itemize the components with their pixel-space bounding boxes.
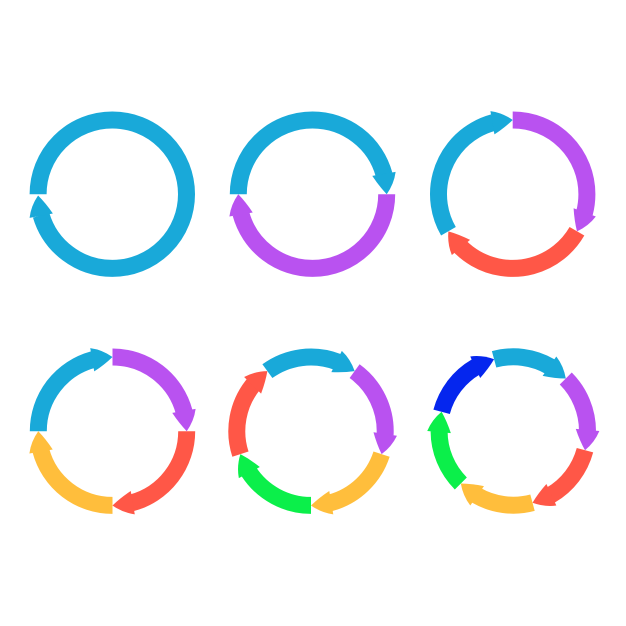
arrow: purple <box>224 120 387 268</box>
arrow: blue <box>238 120 401 268</box>
arrow: purple <box>438 120 596 268</box>
arrow: red <box>422 340 604 522</box>
wheel: four-step cycle <box>24 343 201 520</box>
arrow: blue <box>38 343 187 505</box>
arrow: green <box>408 326 618 536</box>
arrow: blue <box>422 340 604 522</box>
arrow: yellow <box>422 340 604 522</box>
wheel: three-step cycle <box>411 93 614 296</box>
arrow: blue <box>207 328 415 535</box>
wheel: six-step cycle <box>408 326 618 536</box>
arrow: purple <box>38 357 201 505</box>
arrow: red <box>218 338 404 525</box>
arrow: green <box>228 357 385 505</box>
wheel: one-step cycle <box>24 120 187 268</box>
arrow: purple <box>207 328 415 535</box>
arrow: red <box>411 93 614 296</box>
wheel: five-step cycle <box>207 328 415 535</box>
arrow: yellow <box>218 338 404 525</box>
wheel: two-step cycle <box>224 120 401 268</box>
arrow: purple <box>408 326 618 536</box>
arrow: red <box>38 357 187 520</box>
arrow: blue <box>411 93 614 296</box>
arrow: dark blue <box>422 340 604 522</box>
arrow: blue ring <box>24 120 187 268</box>
arrow: yellow <box>24 357 187 505</box>
